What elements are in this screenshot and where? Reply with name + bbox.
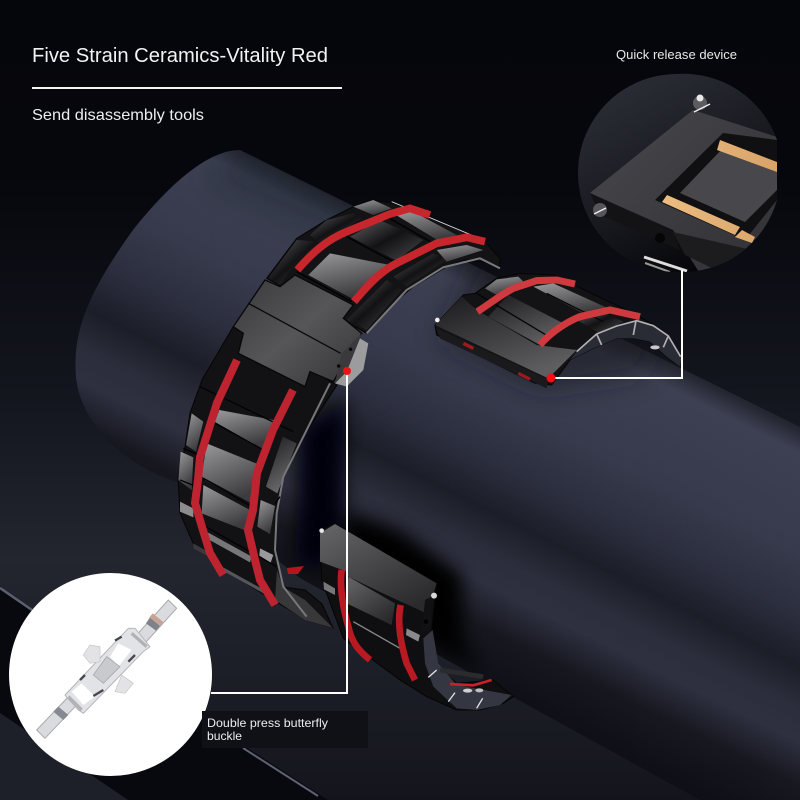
link separators	[180, 387, 293, 567]
silver buckle	[37, 600, 177, 738]
left column highlights	[186, 413, 203, 452]
red inlay stripes	[297, 208, 485, 302]
red inlay stripes	[341, 570, 415, 680]
label: quick release device: Quick release device	[616, 48, 737, 62]
top face	[320, 524, 437, 613]
device body	[590, 110, 777, 270]
right links	[347, 280, 402, 330]
watch strap: upper detached section	[435, 273, 682, 388]
callout leader: quick release	[546, 270, 682, 382]
inner edge bevel	[367, 258, 500, 333]
watch strap: upper main section	[267, 200, 500, 333]
curved inner links	[275, 570, 333, 628]
centre column highlights	[215, 410, 273, 448]
callout leader: butterfly buckle	[211, 367, 351, 693]
cylinder	[76, 150, 800, 778]
title: Five Strain Ceramics-Vitality Red	[32, 45, 328, 67]
subtitle: Send disassembly tools	[32, 107, 204, 124]
red inlay stripes	[477, 280, 640, 345]
lens: quick release device close-up	[578, 74, 777, 272]
watch strap: lower main section	[178, 327, 337, 628]
label: double press butterfly buckle: Double press butterfly	[207, 716, 328, 730]
fold-over clasp	[233, 275, 368, 387]
lens: butterfly buckle close-up	[9, 573, 212, 776]
title underline	[32, 87, 342, 89]
pins	[693, 96, 707, 110]
curved end links	[423, 630, 512, 710]
pins and hole	[319, 528, 324, 533]
outer links	[268, 240, 318, 285]
right edge bevel	[275, 383, 330, 617]
right column highlights	[266, 437, 297, 493]
label: double press butterfly buckle: buckle	[207, 729, 242, 743]
copper bars	[662, 140, 777, 243]
centre blocks	[488, 295, 563, 345]
label: double press butterfly buckle	[202, 711, 368, 748]
red inlay stripes	[195, 360, 293, 605]
end plate	[435, 297, 577, 378]
curved end links	[570, 322, 682, 367]
centre blocks	[308, 253, 390, 298]
watch strap: lower end piece	[319, 523, 513, 710]
